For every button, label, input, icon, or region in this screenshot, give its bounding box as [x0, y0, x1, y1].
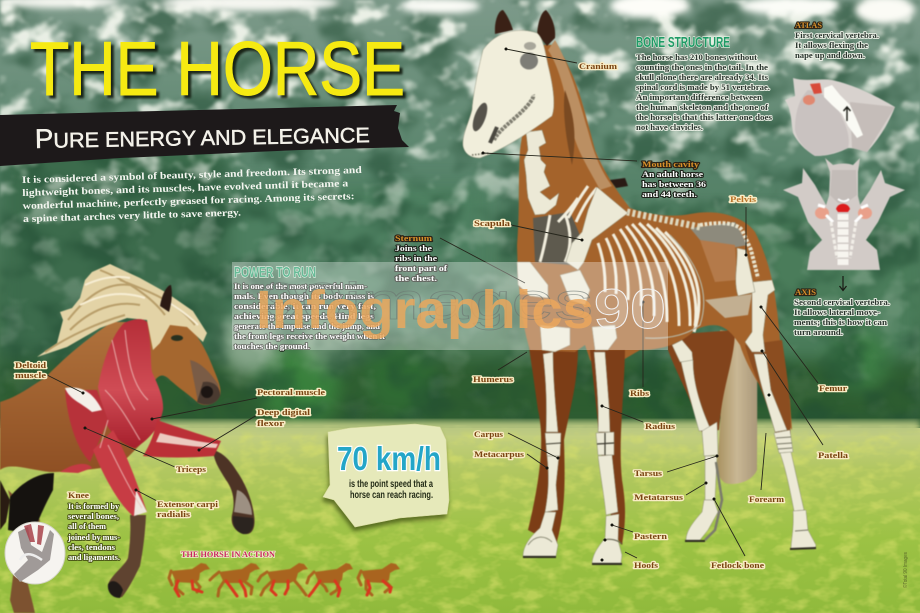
bone structure: counting the ones in the tail. In the [636, 62, 768, 72]
near hind leg flesh [745, 340, 791, 435]
sternum label: Joins the [395, 243, 432, 253]
watermark: Infographics [256, 280, 594, 340]
skull [463, 30, 554, 158]
horse in action heading: THE HORSE IN ACTION [181, 549, 276, 559]
sternum label: the chest. [395, 273, 437, 283]
cervical vertebrae [524, 130, 559, 215]
speed callout card: horse can reach racing. [350, 490, 433, 501]
bone structure [636, 34, 773, 132]
muscle labels: radialis [157, 510, 190, 519]
knee text: cles, tendons [68, 543, 115, 552]
leader lines and dots [47, 49, 823, 560]
title: THE HORSE [30, 27, 405, 112]
skeleton labels: Pastern [634, 532, 668, 541]
far hind leg [8, 490, 40, 613]
knee text: It is formed by [68, 502, 119, 511]
sternum label: Sternum [395, 234, 432, 243]
skeleton labels: Humerus [473, 375, 513, 384]
mouth cavity label: An adult horse [642, 169, 703, 179]
muscle horse photo [0, 264, 255, 613]
knee text: several bones, [68, 512, 119, 521]
skeleton labels: Cranium [579, 62, 617, 71]
intro text [22, 165, 364, 225]
horse body [0, 322, 155, 472]
ribs [540, 186, 699, 332]
chest muscle [98, 319, 163, 448]
far fore leg flesh [528, 340, 578, 545]
power to run [234, 264, 385, 351]
knee text: and ligaments. [68, 553, 120, 562]
mouth cavity label: has between 36 [642, 179, 706, 189]
mouth cavity label [642, 160, 706, 199]
power to run: mals. Even though its body mass is [234, 291, 375, 301]
speed callout card: is the point speed that a [349, 479, 433, 490]
raised foreleg lower part [213, 450, 255, 534]
muscle labels: muscle [15, 371, 47, 380]
muscle labels: flexor [257, 419, 285, 428]
skeleton labels: Ribs [630, 389, 649, 398]
knee text: Knee [68, 491, 90, 500]
muscle labels [15, 361, 326, 519]
mane [548, 40, 612, 190]
power to run: touches the ground. [234, 341, 310, 351]
far hind leg flesh [668, 330, 735, 432]
bone structure: The horse has 210 bones without [636, 52, 757, 62]
hind far leg bones [672, 340, 693, 362]
skeleton labels: Pelvis [730, 195, 756, 204]
sternum label: ribs in the [395, 253, 437, 263]
power to run: It is one of the most powerful mam- [234, 281, 367, 291]
muscle labels: Extensor carpi [157, 500, 219, 509]
axis arrow [840, 276, 846, 290]
banner with subtitle [0, 105, 409, 166]
mouth cavity label: Mouth cavity [642, 160, 699, 169]
muscle labels: Deltoid [15, 361, 47, 370]
inset: knee [5, 522, 65, 584]
arrow up [844, 107, 850, 121]
bone structure: skull alone there are already 34. Its [636, 72, 769, 82]
humerus far [517, 262, 548, 298]
skeleton labels: Tarsus [634, 469, 662, 478]
muscle labels: Pectoral muscle [257, 388, 326, 397]
humerus near [560, 270, 590, 305]
supporting foreleg lower part [109, 515, 146, 597]
intro text: a spine that arches very little to save energy. [23, 208, 242, 225]
skeleton labels: Patella [818, 451, 848, 460]
atlas text: nape up and down. [795, 50, 865, 60]
muscle labels: Deep digital [257, 408, 311, 417]
axis text: AXIS [795, 288, 817, 297]
forearm muscle raised [143, 420, 221, 458]
axis text: ments; this is how it can [794, 317, 887, 327]
pelvis shadow [690, 222, 748, 250]
axis text: It allows lateral move- [794, 307, 880, 317]
skeleton bones [463, 30, 816, 564]
muscle labels: Triceps [176, 465, 206, 474]
watermark [232, 262, 668, 350]
bone structure: the horse is that this latter one does [636, 112, 773, 122]
skeleton labels: Metacarpus [474, 450, 524, 459]
intro text: lightweight bones, and its muscles, have evolved until it became a [22, 178, 348, 199]
speed callout card [323, 424, 449, 527]
intro text: wonderful machine, perfectly greased for racing. Among its secrets: [23, 191, 355, 212]
mouth cavity label: and 44 teeth. [642, 189, 697, 199]
horse in action sequence [169, 563, 400, 596]
bone structure: not have clavicles. [636, 122, 703, 132]
bone structure: spinal cord is made by 51 vertebrae. [636, 82, 770, 92]
scapula [566, 187, 628, 270]
banner with subtitle: PURE ENERGY AND ELEGANCE [35, 118, 370, 154]
atlas text [795, 21, 879, 60]
spine [627, 212, 700, 227]
ear [160, 285, 172, 312]
skeleton labels: Forearm [749, 495, 784, 504]
shoulder muscle [65, 390, 108, 462]
power to run: generate the impulse and the jump, and [234, 321, 380, 331]
power to run: achieving great speeds. Hind legs [234, 311, 375, 321]
knee text: joined by mus- [67, 533, 120, 542]
speed callout card: 70 km/h [337, 440, 441, 477]
skeleton labels: Carpus [474, 430, 503, 439]
atlas text: First cervical vertebra. [795, 30, 879, 40]
grey chest cavity [533, 212, 582, 265]
skeleton horse body [495, 10, 792, 545]
skeleton labels: Femur [819, 384, 848, 393]
skeleton labels: Scapula [474, 219, 510, 228]
tail [717, 330, 757, 484]
head [147, 315, 221, 405]
atlas illustration [785, 78, 895, 156]
watermark: 90 [594, 277, 666, 340]
near fore leg bones [594, 352, 610, 432]
intro text: It is considered a symbol of beauty, style and freedom. Its strong and [22, 165, 362, 186]
body coat [517, 45, 792, 430]
copyright: ©Total 90 Images [902, 552, 909, 588]
mane [37, 264, 207, 357]
bone structure: BONE STRUCTURE [636, 34, 730, 51]
hind near leg bones [754, 354, 787, 432]
power to run: POWER TO RUN [234, 264, 316, 281]
power to run: the front legs receive the weight when it [234, 331, 385, 341]
far fore leg bones [543, 352, 558, 432]
power to run: considerable, it can run very fast, [234, 301, 376, 311]
skeleton labels: Radius [645, 422, 675, 431]
skeleton labels: Metatarsus [634, 493, 683, 502]
watermark: 90images [258, 273, 593, 331]
pelvis white [736, 248, 755, 296]
femur [745, 280, 775, 352]
near foreleg flesh [590, 350, 625, 545]
axis illustration [783, 158, 905, 270]
black hind thigh [8, 473, 54, 535]
atlas text: ATLAS [795, 21, 823, 30]
axis text: Second cervical vertebra. [794, 297, 890, 307]
bone structure: An important difference between [636, 92, 762, 102]
knee text [67, 491, 120, 562]
ears [495, 10, 513, 34]
atlas text: It allows flexing the [795, 40, 868, 50]
sternum label [395, 234, 447, 283]
forearm muscle supporting [93, 430, 147, 516]
axis text [794, 288, 890, 337]
axis text: turn around. [794, 327, 843, 337]
skeleton labels: Fetlock bone [711, 561, 765, 570]
knee text: all of them [68, 522, 106, 531]
skeleton labels [473, 62, 848, 570]
skeleton labels: Hoofs [634, 561, 658, 570]
bone structure: the human skeleton and the one of [636, 102, 768, 112]
sternum label: front part of [395, 263, 447, 273]
